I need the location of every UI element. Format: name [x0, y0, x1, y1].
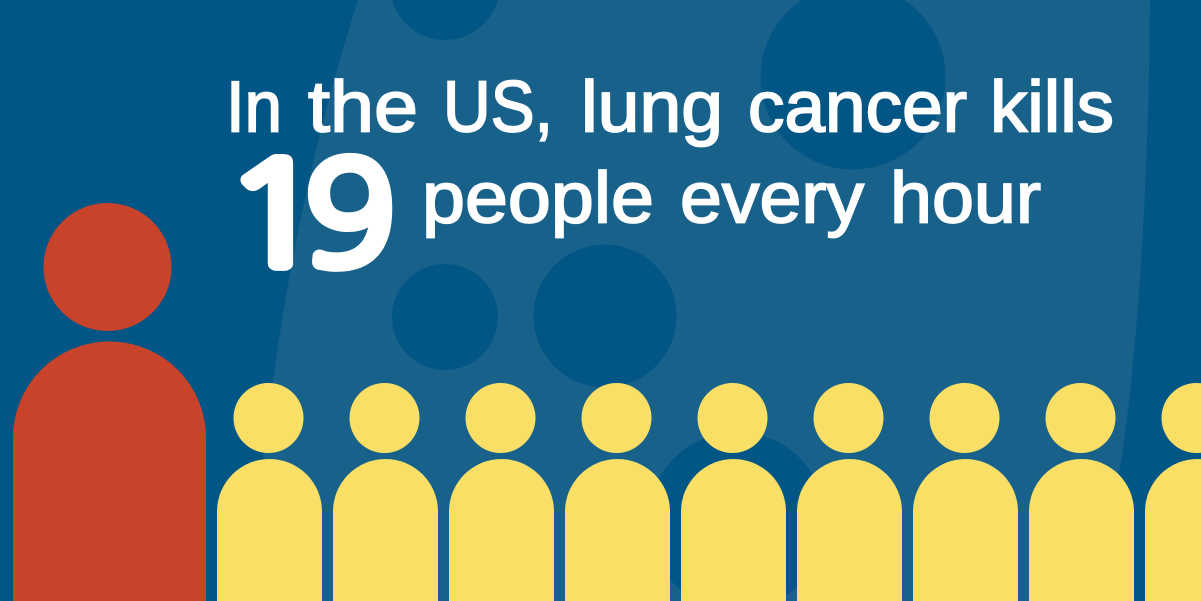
headline: people: [422, 158, 654, 238]
headline: kills: [990, 68, 1114, 148]
headline: [226, 68, 1114, 238]
headline: hour: [890, 158, 1041, 238]
background circles: [390, 0, 946, 601]
yellow people row: [217, 383, 1201, 601]
headline: US,: [443, 68, 553, 148]
background lung shape: [255, 0, 1150, 601]
headline: lung: [581, 68, 723, 148]
big number 19: 9: [304, 144, 396, 286]
headline: every: [680, 158, 864, 238]
headline: the: [308, 68, 418, 148]
big number 19: 1: [222, 144, 328, 286]
headline: cancer: [748, 68, 967, 148]
headline: In: [226, 68, 282, 148]
red person: [13, 203, 206, 601]
big number 19: [222, 144, 396, 286]
